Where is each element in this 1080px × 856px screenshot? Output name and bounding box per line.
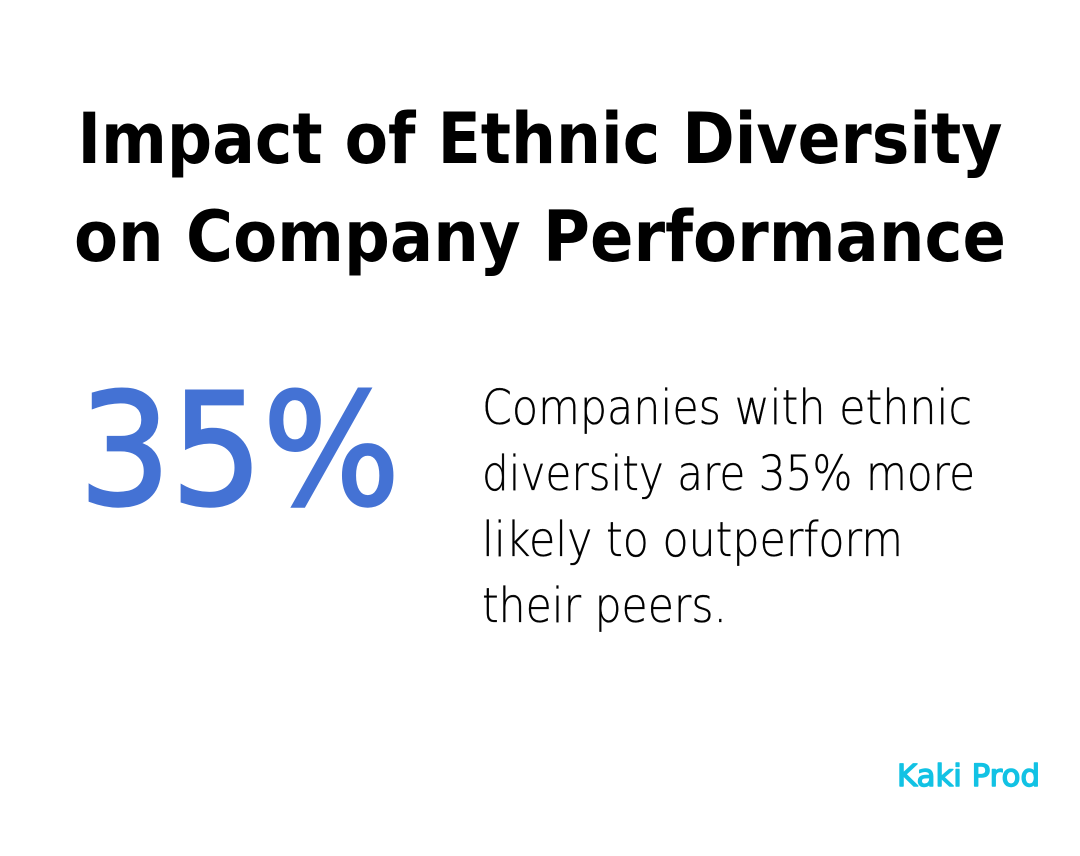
title [74, 98, 1006, 278]
logo: Kaki Prod: Kaki Prod [897, 759, 1040, 794]
description text: diversity are 35% more [482, 446, 975, 502]
description text [482, 380, 975, 634]
description text: their peers. [482, 578, 727, 634]
description text: Companies with ethnic [482, 380, 972, 436]
big statistic: 35%: 35% [79, 360, 400, 541]
description text: likely to outperform [482, 512, 903, 568]
title: on Company Performance [74, 196, 1006, 278]
title: Impact of Ethnic Diversity [78, 98, 1002, 180]
